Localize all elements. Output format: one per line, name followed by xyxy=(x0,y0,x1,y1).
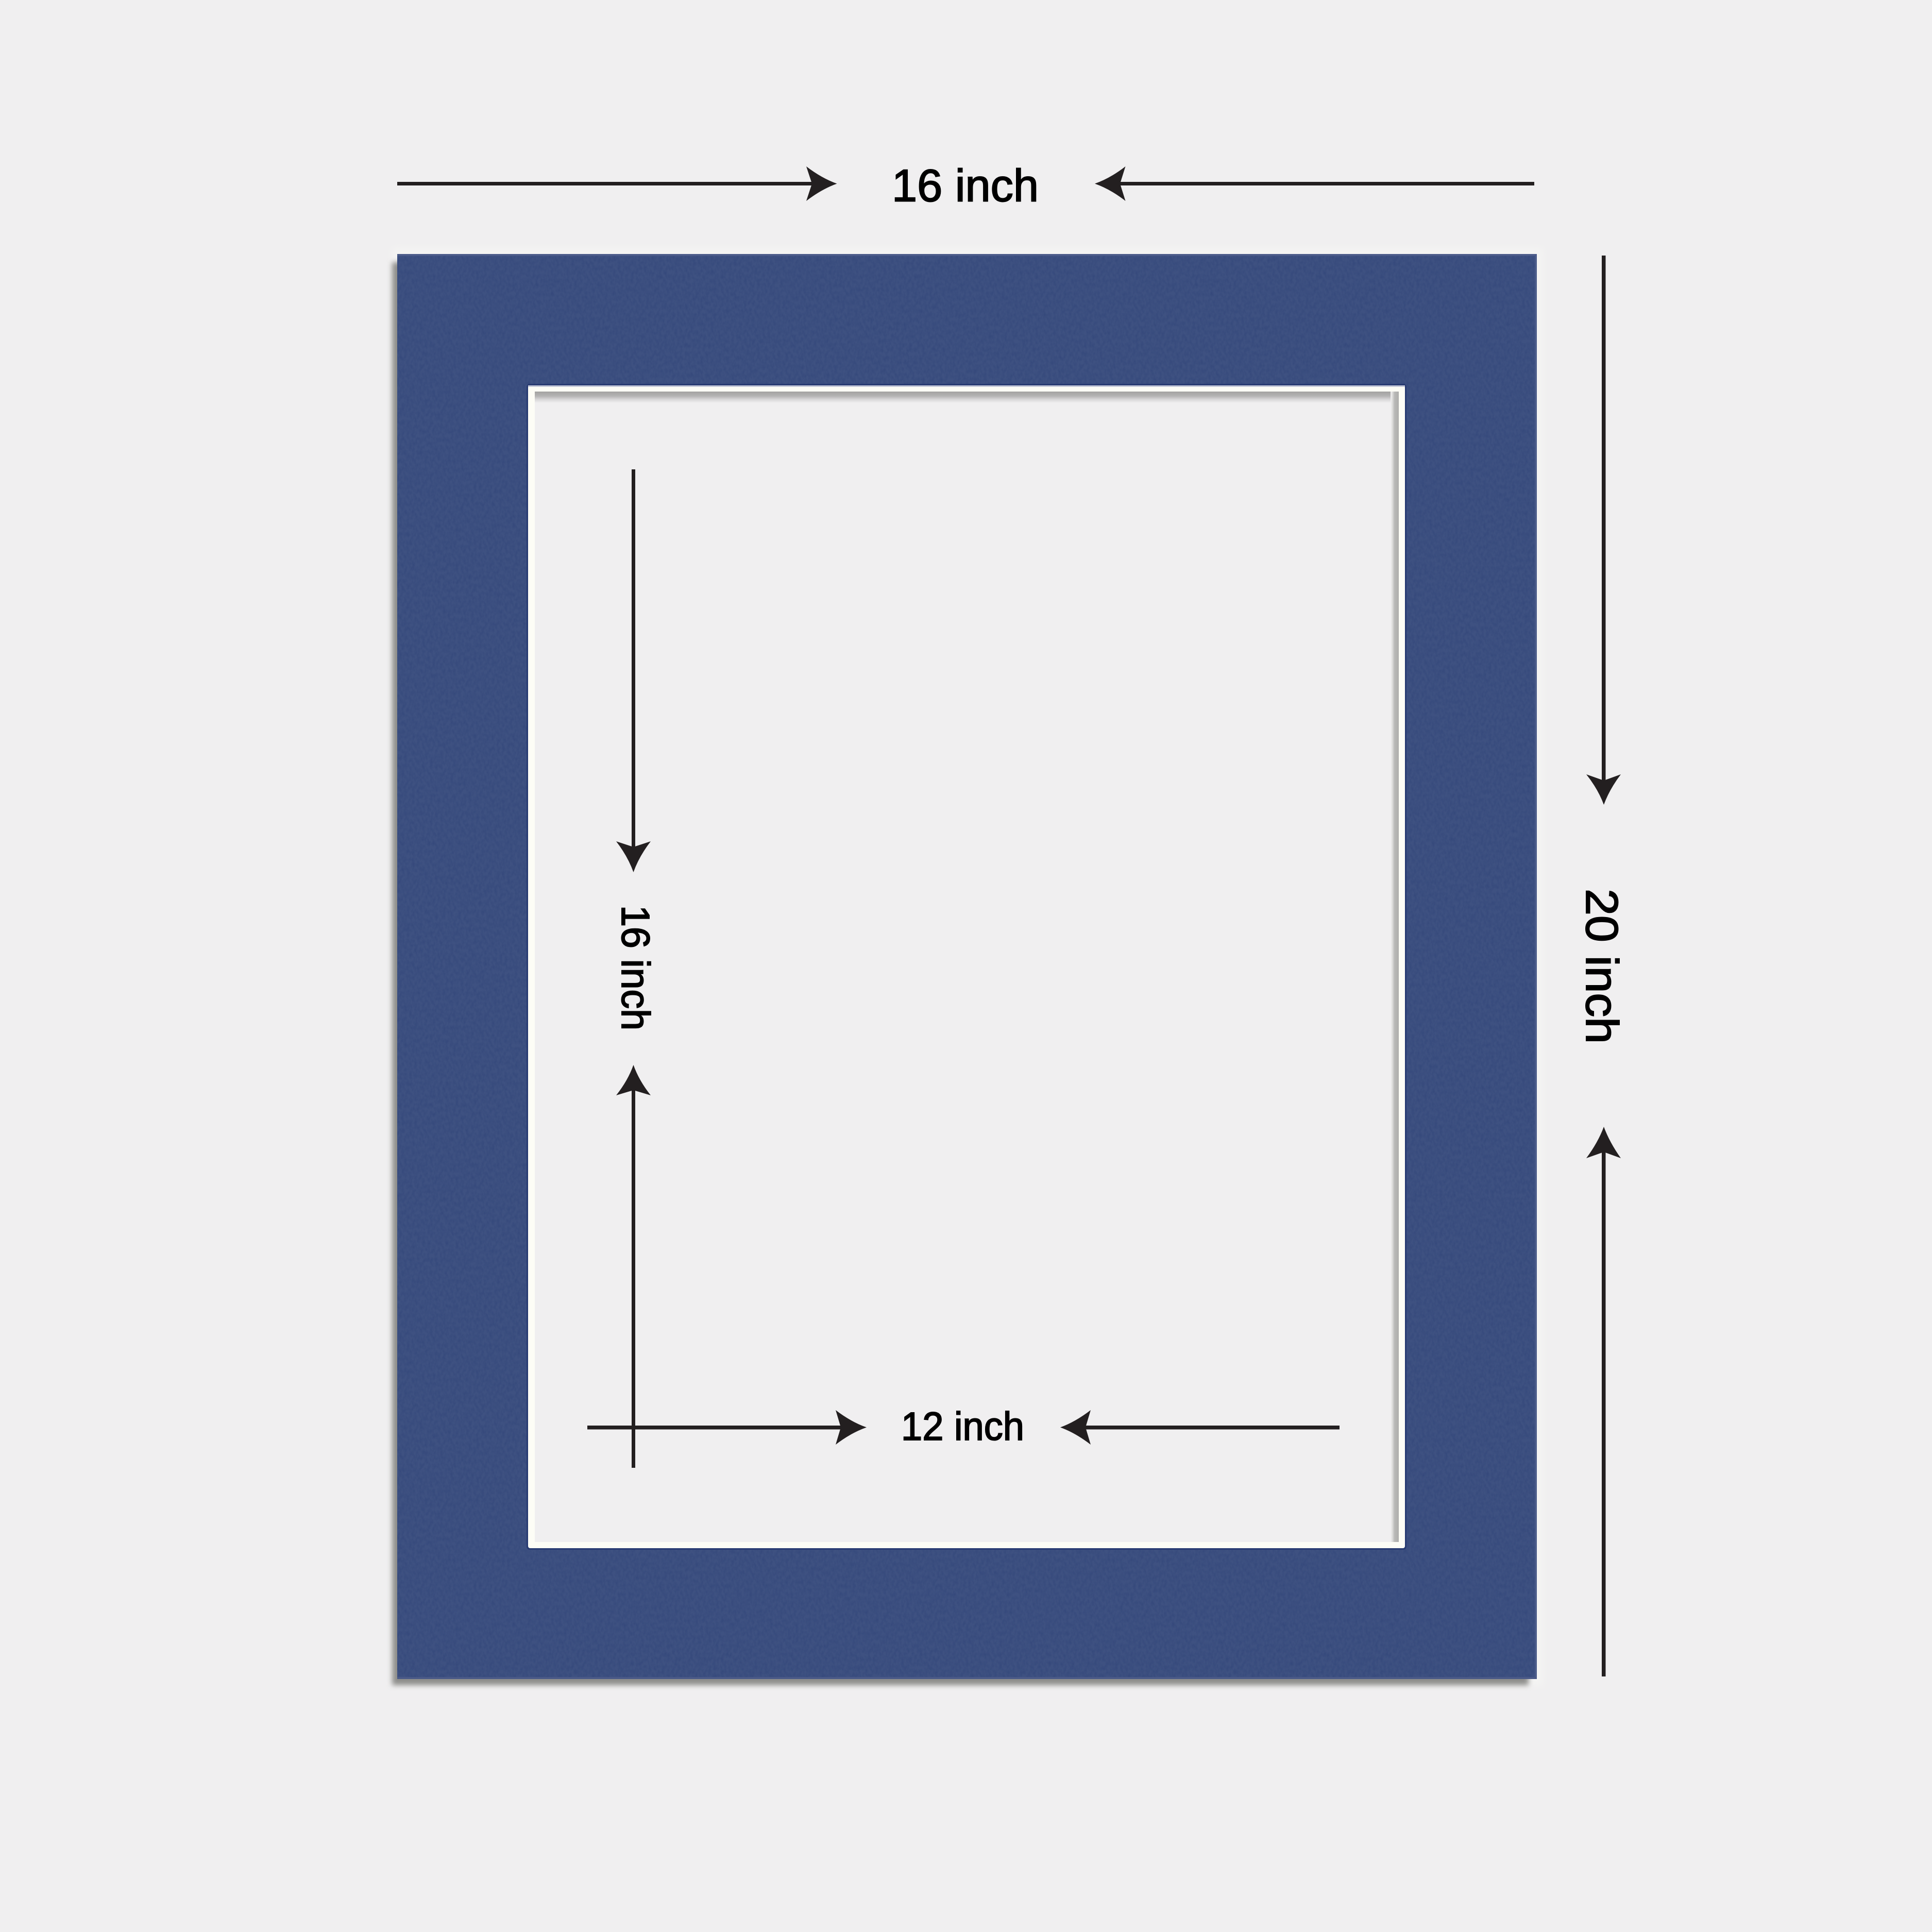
arrow: outer height top xyxy=(1586,256,1621,805)
window bevel and opening xyxy=(528,385,1405,1548)
arrow: inner width right xyxy=(1060,1410,1340,1445)
arrow: inner height bottom xyxy=(616,1065,651,1468)
label: inner height: 16 inch xyxy=(613,905,657,1030)
arrow: outer height bottom xyxy=(1586,1127,1621,1676)
arrow: outer width left xyxy=(397,166,837,201)
label: inner width: 12 inch xyxy=(901,1404,1024,1449)
arrow: outer width right xyxy=(1095,166,1534,201)
arrow: inner width left xyxy=(587,1410,867,1445)
label: outer height: 20 inch xyxy=(1577,889,1628,1044)
arrow: inner height top xyxy=(616,469,651,872)
panel: blue photo mat with window xyxy=(392,248,1543,1686)
label: outer width: 16 inch xyxy=(892,160,1039,211)
